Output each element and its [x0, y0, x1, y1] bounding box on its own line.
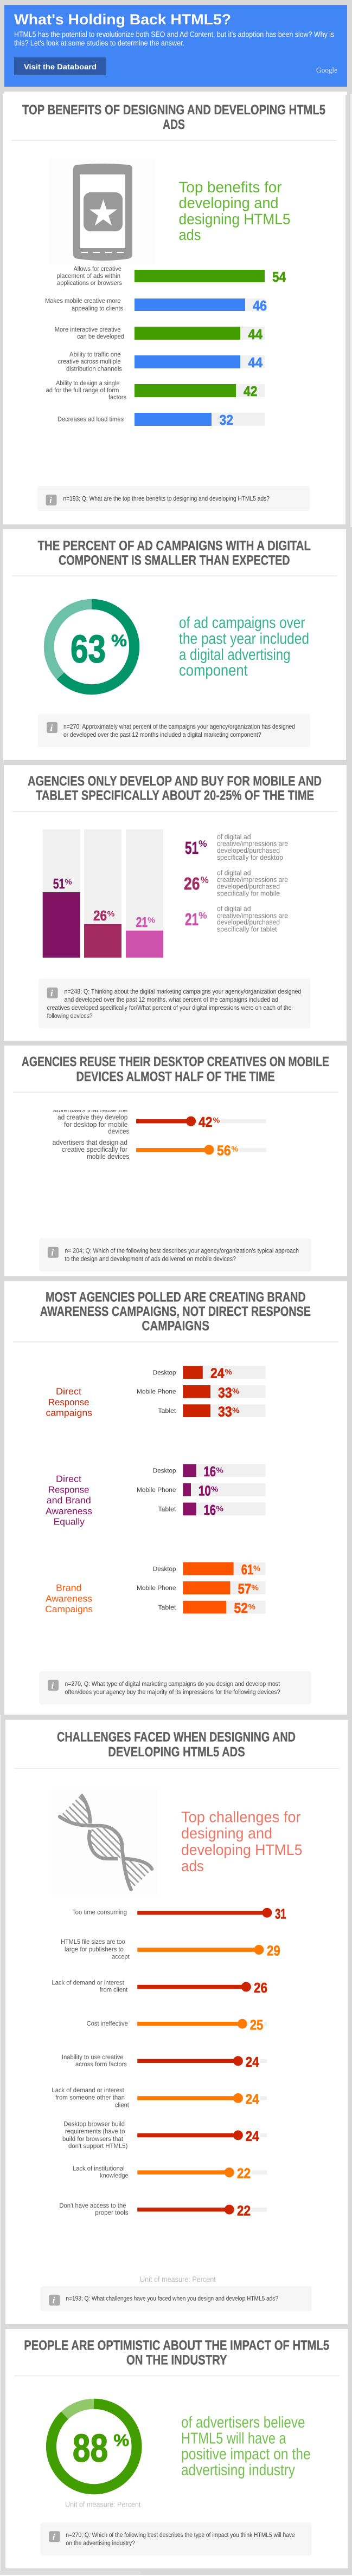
row: 24 form factors [62, 2053, 267, 2070]
info note: n=270, Q: What type of digital marketing campaigns do you design and develop most [65, 1680, 280, 1688]
bar: tablet 33%: 33 [218, 1404, 232, 1420]
row: 44 green [55, 326, 265, 342]
category label: Direct [56, 1386, 81, 1397]
row: 44 blue: creative across multiple [57, 358, 121, 365]
stat: mobile: 26 [184, 874, 200, 893]
donut chart: 88% [51, 2404, 137, 2489]
panel: device split [4, 765, 347, 1041]
info note: and developed over the past 12 months, what percent of the campaigns included ad [64, 996, 278, 1003]
bar: tablet 52% [158, 1600, 265, 1616]
heading: ADS [163, 117, 185, 132]
category label: campaigns [46, 1408, 92, 1418]
column: mobile: % [107, 910, 115, 918]
callout text [181, 1809, 302, 1874]
stat: desktop: specifically for desktop [217, 853, 283, 861]
stat: mobile: creative/impressions are [217, 875, 288, 884]
bar: mobile 33% [137, 1384, 265, 1400]
callout text [181, 2414, 311, 2479]
info note: or developed over the past 12 months included a digital marketing component? [63, 731, 261, 738]
button: visit the databoard: Visit the Databoard [24, 62, 97, 71]
panel: challenges [5, 1720, 348, 2324]
callout text [179, 614, 309, 679]
bar: desktop 16%: % [216, 1465, 224, 1474]
bar: mobile 10%: Mobile Phone [137, 1486, 176, 1494]
heading: COMPONENT IS SMALLER THAN EXPECTED [59, 553, 290, 568]
row: 26: from client [100, 1985, 128, 1993]
bar: tablet 52%: % [248, 1602, 255, 1611]
category label: Campaigns [45, 1604, 93, 1614]
donut chart: 63%: 63 [71, 628, 106, 671]
icon: info [47, 722, 57, 733]
bar: mobile 10% [137, 1482, 265, 1498]
google logo text: Google [316, 67, 337, 75]
banner intro text [14, 30, 334, 47]
info note: n=193; Q: What challenges have you faced when you design and develop HTML5 ads? [66, 2295, 278, 2302]
bar: desktop 24%: Desktop [153, 1368, 176, 1376]
bar: mobile 10%: 10 [199, 1482, 211, 1498]
stat: tablet: of digital ad [217, 905, 251, 913]
icon: info [49, 2295, 60, 2306]
callout text: Top challenges for [181, 1809, 300, 1826]
info note [41, 2286, 312, 2311]
bar: tablet 16%: 16 [204, 1502, 216, 1518]
bar: mobile 33%: Mobile Phone [137, 1388, 176, 1396]
row: 22 knowledge: knowledge [100, 2171, 129, 2179]
row: 44 blue: distribution channels [66, 365, 122, 373]
bar: desktop 16%: Desktop [153, 1467, 176, 1475]
bar: mobile 10%: % [211, 1485, 219, 1494]
row: 24 desktop browsers: don't support HTML5) [68, 2142, 127, 2150]
bar: desktop 16%: 16 [204, 1463, 216, 1480]
stat: desktop: 51 [185, 838, 199, 858]
column: tablet: 21 [136, 914, 148, 930]
row: design 56%: advertisers that design ad [53, 1138, 127, 1146]
row: 54: 54 [272, 269, 286, 285]
row: design 56%: % [231, 1144, 239, 1153]
unit of measure: Unit of measure: Percent [140, 2275, 216, 2283]
callout text: of ad campaigns over [179, 614, 305, 632]
row: 29: large for publishers to [65, 1945, 124, 1953]
row: 42 [46, 379, 265, 401]
callout text [179, 179, 291, 243]
info note [38, 714, 310, 747]
info note: n= 204; Q: Which of the following best describes your agency/organization's typical approach [65, 1247, 299, 1255]
row: 54 [56, 265, 286, 287]
heading: ON THE INDUSTRY [126, 2352, 227, 2367]
category label [45, 1583, 93, 1614]
bar: mobile 33%: % [232, 1387, 240, 1396]
row: 26: Lack of demand or interest [52, 1979, 124, 1987]
row: 24 other demand: from someone other than [55, 2094, 125, 2101]
callout text: designing and [181, 1825, 272, 1842]
heading [57, 1730, 296, 1760]
bar: tablet 52%: 52 [234, 1600, 248, 1616]
row: 22 knowledge: 22 [237, 2165, 251, 2182]
column: tablet [126, 829, 163, 958]
row: 24 desktop browsers: requirements (have to [65, 2127, 125, 2135]
bar: mobile 57%: 57 [238, 1581, 251, 1597]
header banner [4, 5, 347, 87]
category label [46, 1474, 92, 1527]
heading [38, 538, 311, 568]
info note: following devices? [47, 1012, 93, 1020]
row: 46: 46 [253, 297, 267, 314]
bar: desktop 61% [153, 1561, 265, 1578]
row: 31: 31 [275, 1905, 286, 1922]
stat: tablet [185, 905, 288, 933]
stat: tablet: specifically for tablet [217, 925, 277, 933]
stat: mobile [184, 868, 288, 897]
row: 25: 25 [250, 2016, 263, 2033]
category label: Equally [54, 1517, 85, 1527]
row: 22 tools: proper tools [95, 2209, 129, 2216]
row: 22 tools: Don't have access to the [59, 2202, 126, 2209]
bar: tablet 16%: % [216, 1504, 224, 1513]
button: visit the databoard [14, 57, 106, 75]
icon: info [48, 1680, 59, 1691]
row: reuse 42%: ad creative they develop [57, 1113, 127, 1121]
heading: DEVICES ALMOST HALF OF THE TIME [76, 1069, 275, 1084]
group: direct response [46, 1365, 265, 1420]
row: 24 desktop browsers: 24 [245, 2128, 259, 2144]
slider chart [53, 1110, 266, 1159]
icon: info: i [53, 2295, 55, 2306]
icon: info: i [49, 495, 52, 505]
row: 25: Cost ineffective [87, 2020, 128, 2027]
bar: mobile 57%: % [251, 1583, 259, 1592]
info note: n=270; Approximately what percent of the campaigns your agency/organization has designed [63, 723, 295, 730]
row: 46: appealing to clients [72, 304, 123, 312]
row: design 56% [53, 1138, 266, 1160]
callout text: a digital advertising [179, 646, 291, 664]
callout text: of advertisers believe [181, 2414, 305, 2431]
row: 24 desktop browsers: build for browsers that [62, 2135, 124, 2143]
stat: desktop: creative/impressions are [217, 840, 288, 848]
panel: creative reuse [4, 1046, 347, 1276]
row: reuse 42%: for desktop for mobile [64, 1120, 127, 1128]
row: 31 [72, 1905, 286, 1922]
row: reuse 42%: devices [108, 1127, 130, 1135]
column: mobile [84, 829, 121, 958]
info note: n=248; Q: Thinking about the digital marketing campaigns your agency/organization designed [64, 988, 301, 995]
icon: dna helix [52, 1787, 158, 1897]
row: 44 blue [57, 351, 265, 373]
bar: mobile 57%: Mobile Phone [137, 1584, 176, 1592]
bar: tablet 16% [158, 1502, 265, 1518]
icon: info: i [50, 723, 53, 733]
icon: info [47, 988, 58, 998]
callout text: advertising industry [181, 2462, 295, 2479]
stat: desktop: developed/purchased [217, 846, 280, 854]
bar: mobile 57% [137, 1581, 265, 1597]
info note [37, 486, 310, 511]
row: reuse 42% [53, 1110, 266, 1134]
row: 26 [52, 1979, 268, 1996]
panel: optimism [5, 2329, 348, 2568]
banner title: What's Holding Back HTML5? [14, 11, 231, 28]
heading: CAMPAIGNS [142, 1319, 209, 1334]
row: 44 green: 44 [248, 326, 263, 342]
heading [28, 774, 322, 803]
category label: Brand [56, 1583, 81, 1593]
info note: on the advertising industry? [66, 2539, 135, 2547]
icon: info: i [51, 1680, 54, 1691]
row: 24 other demand: Lack of demand or interest [52, 2086, 124, 2094]
bar: tablet 33%: % [232, 1406, 240, 1414]
row: 44 green: can be developed [77, 333, 124, 340]
info note [39, 979, 310, 1028]
bar: desktop 16% [153, 1463, 265, 1480]
row: design 56%: mobile devices [87, 1152, 130, 1160]
donut chart: 63%: % [111, 631, 127, 650]
unit of measure: Unit of measure: Percent [65, 2500, 140, 2509]
row: 29 [61, 1938, 281, 1961]
row: 22 tools [59, 2202, 267, 2218]
info note: n=270; Q: Which of the following best describes the type of impact you think HTML5 will have [66, 2531, 295, 2539]
category label: Awareness [46, 1594, 92, 1604]
column: tablet: % [148, 916, 156, 924]
stat: desktop [185, 833, 288, 861]
stat: mobile: of digital ad [217, 868, 251, 877]
icon: info [49, 2531, 60, 2542]
icon: info [48, 1247, 59, 1258]
donut chart: 88%: % [113, 2431, 129, 2450]
info note: n=193; Q: What are the top three benefits to designing and developing HTML5 ads? [63, 495, 270, 502]
row: 44 blue: 44 [248, 354, 263, 371]
row: 24 other demand: client [115, 2101, 130, 2109]
category label: and Brand [47, 1495, 91, 1506]
row: 42: factors [108, 393, 126, 401]
slider chart: challenges [52, 1905, 286, 2218]
callout text: positive impact on the [181, 2446, 311, 2463]
callout text: Top benefits for [179, 179, 282, 196]
category label: Response [48, 1397, 89, 1407]
bar: desktop 61%: 61 [241, 1561, 253, 1578]
icon: info [46, 495, 56, 505]
row: 29: 29 [267, 1942, 280, 1958]
bar: tablet 33%: Tablet [158, 1407, 176, 1414]
row: 44 blue: Ability to traffic one [69, 351, 121, 358]
callout text: ads [179, 226, 201, 243]
column: desktop: 51 [53, 875, 65, 892]
bar chart: benefits [45, 265, 286, 428]
banner intro text: this? Let's look at some studies to determine the answer. [14, 38, 184, 47]
group: brand awareness [45, 1561, 265, 1616]
row: 42: ad for the full range of form [46, 386, 119, 394]
column: mobile: 26 [93, 907, 107, 924]
bar: tablet 16%: Tablet [158, 1506, 176, 1513]
row: 24 form factors: 24 [245, 2054, 259, 2070]
row: 22 knowledge: Lack of institutional [73, 2164, 125, 2172]
stat: mobile: % [201, 875, 209, 885]
row: 54: Allows for creative [74, 265, 121, 272]
category label: Awareness [46, 1506, 92, 1516]
info note [41, 2522, 312, 2555]
bar: desktop 61%: Desktop [153, 1565, 176, 1573]
info note: creatives developed specifically for/What percent of your digital impressions were on each of the [47, 1004, 292, 1011]
row: 32: Decreases ad load times [57, 415, 124, 423]
row: 22 knowledge [73, 2164, 267, 2182]
row: 26: 26 [254, 1980, 267, 1996]
category label [46, 1386, 92, 1418]
bar: desktop 24%: % [225, 1367, 232, 1376]
heading [40, 1289, 311, 1334]
stat: tablet: creative/impressions are [217, 911, 288, 919]
bar: tablet 52%: Tablet [158, 1604, 176, 1611]
bar: mobile 33%: 33 [218, 1384, 232, 1400]
row: 54: applications or browsers [57, 279, 122, 287]
icon: info: i [51, 1248, 54, 1258]
callout text: HTML5 will have a [181, 2430, 286, 2447]
info note: often/does your agency buy the majority of its impressions for the following devices? [65, 1688, 280, 1696]
stat: tablet: % [199, 911, 207, 921]
row: 29: HTML5 file sizes are too [61, 1938, 125, 1945]
stat: tablet: developed/purchased [217, 918, 280, 926]
heading [22, 1054, 329, 1084]
row: 46: Makes mobile creative more [45, 297, 121, 304]
stat: mobile: developed/purchased [217, 882, 280, 890]
row: 24 desktop browsers: Desktop browser build [63, 2120, 125, 2127]
icon: phone with star [49, 158, 156, 264]
row: 44 green: More interactive creative [55, 326, 121, 333]
bar: desktop 61%: % [253, 1563, 261, 1572]
bar: desktop 24%: 24 [210, 1365, 225, 1381]
row: design 56%: creative specifically for [62, 1145, 128, 1153]
callout text: designing HTML5 [179, 211, 291, 228]
row: 24 form factors: across form factors [75, 2060, 127, 2068]
callout text: the past year included [179, 631, 309, 648]
heading: DEVELOPING HTML5 ADS [108, 1744, 245, 1760]
heading: CHALLENGES FACED WHEN DESIGNING AND [57, 1730, 296, 1745]
info note [39, 1238, 311, 1271]
icon: info: i [53, 2532, 55, 2542]
stat: desktop: % [199, 839, 207, 849]
callout text: developing and [179, 194, 279, 211]
row: 46 [45, 297, 267, 314]
callout text: developing HTML5 [181, 1841, 302, 1858]
row: 54: placement of ads within [56, 272, 120, 280]
callout text: ads [181, 1858, 204, 1874]
icon: info: i [50, 988, 53, 998]
row: reuse 42%: advertisers that reuse the [53, 1106, 127, 1114]
row: 24 desktop browsers [62, 2120, 267, 2150]
panel: campaign types [4, 1281, 347, 1715]
info note: to the design and development of ads delivered on mobile devices? [65, 1255, 236, 1263]
row: 42: Ability to design a single [56, 379, 120, 387]
row: 32: 32 [219, 412, 233, 428]
stat: tablet: 21 [185, 910, 199, 929]
column chart [43, 829, 163, 958]
donut chart: 63% [49, 604, 135, 690]
bar: desktop 24% [153, 1365, 265, 1381]
panel: top benefits [3, 92, 347, 524]
row: 24 other demand: 24 [245, 2091, 259, 2107]
donut chart: 88%: 88 [73, 2427, 108, 2470]
stat: mobile: specifically for mobile [217, 889, 280, 897]
row: 31: Too time consuming [72, 1909, 127, 1916]
row: 24 form factors: Inability to use creative [62, 2053, 124, 2061]
panel: percent of campaigns [3, 529, 346, 760]
row: 29: accept [112, 1953, 130, 1961]
info note [39, 1671, 311, 1704]
row: design 56%: 56 [217, 1143, 231, 1159]
row: reuse 42%: % [213, 1115, 220, 1124]
row: 22 tools: 22 [237, 2202, 251, 2218]
bar: tablet 33% [158, 1404, 265, 1420]
category label: Direct [56, 1474, 81, 1484]
heading [22, 102, 325, 132]
heading [24, 2338, 329, 2367]
row: 42: 42 [244, 383, 257, 399]
row: 32 [57, 412, 265, 428]
group: direct response and brand awareness equally [46, 1463, 265, 1527]
row: reuse 42%: 42 [199, 1114, 213, 1130]
category label: Response [48, 1485, 89, 1495]
stat: desktop: of digital ad [217, 833, 251, 841]
column: desktop: % [65, 878, 72, 886]
callout text: component [179, 662, 248, 679]
column: desktop [43, 829, 80, 958]
row: 24 other demand [52, 2086, 267, 2109]
row: 25 [87, 2016, 267, 2033]
